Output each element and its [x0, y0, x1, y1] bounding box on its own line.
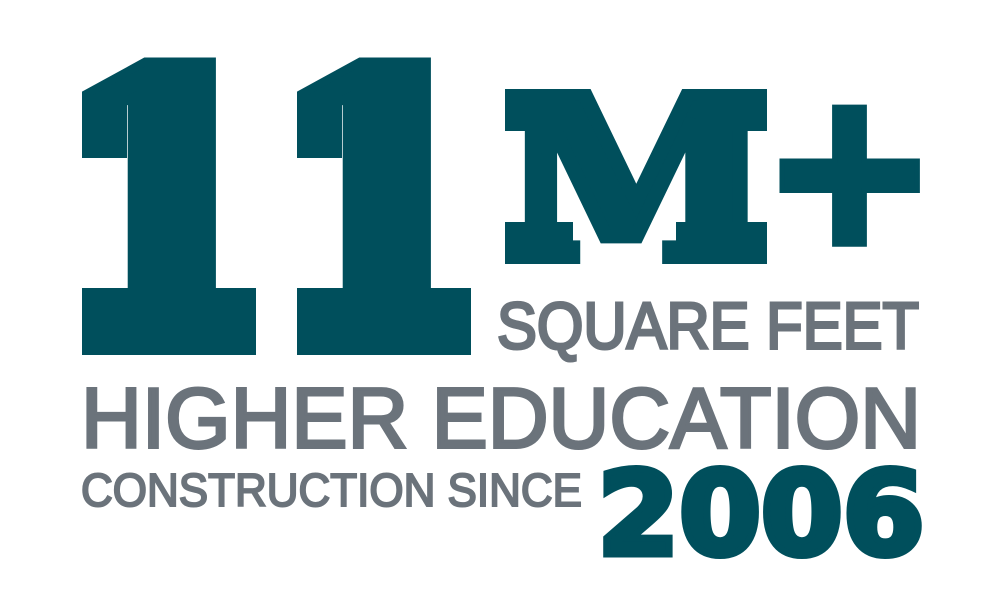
square feet label: SQUARE FEET: [497, 288, 919, 362]
infographic: 11M+ square feet: [82, 58, 922, 559]
big number 11: [82, 58, 471, 355]
year 2006: 2006: [598, 448, 924, 582]
large M: M: [499, 45, 775, 316]
higher education label: HIGHER EDUCATION: [81, 372, 921, 466]
large M: [505, 89, 767, 264]
plus sign: +: [771, 22, 928, 324]
construction since label: CONSTRUCTION SINCE: [81, 464, 582, 516]
